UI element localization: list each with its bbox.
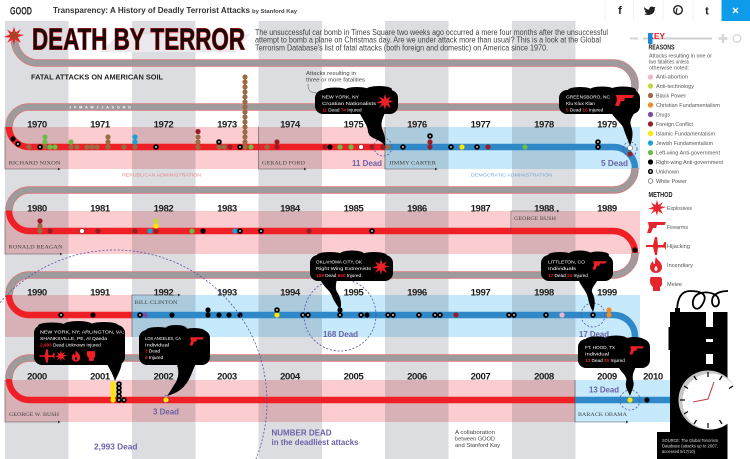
- logo: GOOD: [10, 6, 32, 18]
- method icons: [40, 349, 95, 363]
- main title: DEATH BY TERROR: [32, 22, 245, 56]
- year labels: 1980: [27, 204, 47, 214]
- callout: New York, Arlington, Shanksville 2001: NEW YORK, NY; ARLINGTON, VA;: [40, 330, 124, 334]
- key: reasons: Right-wing Anti-government: [656, 160, 724, 166]
- clock-tower time bomb: [657, 291, 738, 459]
- year labels: 1986: [407, 204, 427, 214]
- callout: Oklahoma City 1995: [310, 250, 393, 311]
- year labels: 2007: [471, 372, 490, 382]
- callout: Oklahoma City 1995: OKLAHOMA CITY, OK: [316, 260, 363, 264]
- callout: Ft. Hood 2009: FT. HOOD, TX: [585, 345, 616, 350]
- year labels: 1993: [217, 288, 237, 298]
- header bar: [0, 0, 750, 21]
- year labels: 1989: [597, 204, 617, 214]
- year labels: 2002: [154, 372, 173, 382]
- callout: New York, Arlington, Shanksville 2001: SHANKSVILLE, PE, Al Qaeda: [40, 336, 107, 341]
- year labels: 1976: [407, 120, 427, 130]
- share buttons: t: [705, 6, 709, 18]
- year labels: 2006: [407, 372, 427, 382]
- callout: New York 1975: 11 Dead 74 Injured: [322, 108, 362, 112]
- year labels: 1999: [597, 288, 617, 298]
- death-toll labels: 13 Dead: [589, 384, 619, 394]
- key: reasons: Foreign Conflict: [656, 122, 694, 128]
- key: method: Melee: [667, 282, 682, 288]
- background column stripes: [5, 21, 576, 459]
- callout: New York 1975: Croatian Nationalists: [322, 101, 377, 106]
- callout: Littleton 1999: LITTLETON, CO: [548, 260, 585, 264]
- article title: Transparency: A History of Deadly Terrorist Attacks: [53, 6, 251, 15]
- key: reasons: REASONS: [648, 44, 675, 52]
- year labels: 2005: [344, 372, 364, 382]
- year labels: 1997: [471, 288, 490, 298]
- year labels: 1979: [597, 120, 617, 130]
- month scale: J F M A M J J A S O N D: [69, 106, 131, 110]
- year labels: 1988: [534, 204, 555, 214]
- death-toll labels: 2,993 Dead: [94, 442, 138, 452]
- intro text: Terrorism Database's list of fatal attacks (both foreign and domestic) on America since 1970.: [255, 44, 548, 52]
- key: method: Incendiary: [667, 263, 693, 269]
- key: reasons: otherwise noted:: [649, 66, 689, 72]
- callout: New York, Arlington, Shanksville 2001: 2,993 Dead Unknown Injured: [40, 342, 101, 348]
- fuse: [677, 291, 728, 312]
- source note: Database (attacks up to 2007,: [662, 444, 718, 448]
- key: reasons: Black Power: [656, 94, 686, 100]
- death-toll labels: 17 Dead: [579, 329, 609, 339]
- annotation: attacks resulting in three or more fatalities: Attacks resulting in: [306, 71, 356, 77]
- year labels: 1994: [280, 288, 301, 298]
- credit text: between GOOD: [455, 436, 495, 442]
- callout: Los Angeles 2002: Individual: [145, 342, 169, 348]
- president term markers: RICHARD NIXON: [8, 160, 60, 166]
- key: method: METHOD: [648, 192, 672, 199]
- zoom controls: [630, 34, 741, 43]
- year labels: 1992: [154, 288, 173, 298]
- key: reasons: Attacks resulting in one or: [649, 54, 712, 60]
- year labels: 1998: [534, 288, 555, 298]
- callout: Littleton 1999: [541, 250, 613, 312]
- president term markers: BARACK OBAMA: [578, 412, 627, 418]
- key: reasons: White Power: [656, 179, 687, 185]
- year labels: 2009: [597, 372, 617, 382]
- callout: Ft. Hood 2009: [578, 336, 650, 396]
- grey outline for non-fatal track sections: [9, 36, 635, 379]
- clock face: [678, 370, 738, 430]
- callout: Ft. Hood 2009: Individual: [585, 352, 609, 356]
- democratic administration label: DEMOCRATIC ADMINISTRATION: [471, 172, 553, 178]
- credit text: A collaboration: [455, 430, 495, 436]
- year labels: 1982: [154, 204, 173, 214]
- administration bands: [5, 127, 670, 422]
- source note: accessed 5/17/10): [662, 449, 696, 454]
- callout: Ft. Hood 2009: 13 Dead 30 Injured: [585, 358, 625, 363]
- year labels: 1974: [280, 120, 301, 130]
- callout: Los Angeles 2002: [139, 325, 210, 396]
- year labels: 2001: [90, 372, 111, 382]
- callout: Greensboro 1979: Klu Klux Klan: [566, 101, 595, 106]
- callout: Oklahoma City 1995: Right Wing Extremists: [316, 266, 372, 271]
- death-toll labels: 168 Dead: [323, 329, 358, 339]
- death-toll labels: [94, 158, 628, 452]
- callout: Los Angeles 2002: LOS ANGELES, CA: [145, 336, 182, 341]
- callout: Greensboro 1979: GREENSBORO, NC: [566, 94, 611, 100]
- tower body: [657, 312, 728, 459]
- year labels: 2004: [280, 372, 301, 382]
- callout: Los Angeles 2002: 4 Injured: [145, 355, 164, 360]
- key heading: KEY: [648, 32, 666, 41]
- timeline track: [9, 36, 670, 400]
- byline: by Stanford Kay: [252, 9, 297, 15]
- death-toll labels: 3 Dead: [153, 406, 179, 416]
- intro text: [255, 28, 608, 52]
- intro text: attempt to bomb a plane on Christmas day. Are we under attack more than usual? This is a look at the Global: [255, 36, 601, 44]
- year labels: 1990: [27, 288, 47, 298]
- key: reasons: Islamic Fundamentalism: [656, 132, 716, 138]
- year labels: 2008: [534, 372, 555, 382]
- year labels: 1978: [534, 120, 555, 130]
- callout: New York 1975: [315, 86, 398, 146]
- president term markers: [5, 127, 628, 423]
- subheading: FATAL ATTACKS ON AMERICAN SOIL: [31, 72, 163, 82]
- callout: Littleton 1999: 17 Dead 24 Injured: [548, 273, 588, 278]
- year labels: 1975: [344, 120, 364, 130]
- death-toll labels: NUMBER DEAD: [272, 428, 332, 438]
- key: reasons: Drugs: [656, 112, 670, 118]
- year labels: 1970: [27, 120, 47, 130]
- source note: [662, 438, 718, 454]
- president term markers: GEORGE BUSH: [514, 216, 556, 222]
- callout: Greensboro 1979: [559, 86, 640, 146]
- president term markers: GERALD FORD: [262, 160, 305, 166]
- year labels: 2010: [643, 372, 663, 382]
- attack dots: [10, 74, 650, 403]
- year labels: 1984: [280, 204, 301, 214]
- key: reasons: Unknown: [656, 170, 679, 176]
- credit text: and Stanford Kay: [455, 443, 500, 449]
- dashed death-toll circles: [0, 138, 640, 459]
- year labels: 1985: [344, 204, 364, 214]
- key: method: Firearms: [667, 225, 688, 231]
- source note: SOURCE: The Global Terrorism: [662, 438, 718, 443]
- year labels: 1996: [407, 288, 427, 298]
- slider handle: [648, 33, 652, 44]
- callout: Greensboro 1979: 5 Dead 10 Injured: [566, 108, 604, 112]
- year labels: 1981: [90, 204, 111, 214]
- share buttons: f: [618, 5, 622, 17]
- year labels: 1973: [217, 120, 237, 130]
- republican administration label: REPUBLICAN ADMINISTRATION: [122, 172, 202, 178]
- year labels: 1991: [90, 288, 111, 298]
- callout: New York 1975: NEW YORK, NY: [322, 94, 360, 100]
- share buttons: ×: [732, 4, 739, 18]
- callout: Oklahoma City 1995: 168 Dead 650 Injured: [316, 273, 361, 278]
- explosion at track start: [4, 27, 24, 45]
- key: reasons: two fatalities unless: [649, 60, 689, 66]
- key: reasons: Left-wing Anti-government: [656, 150, 721, 156]
- president term markers: GEORGE W. BUSH: [9, 412, 59, 418]
- republican red track: [9, 127, 635, 400]
- callout: Los Angeles 2002: 3 Dead: [145, 348, 161, 354]
- annotation: attacks resulting in three or more fatalities: [306, 71, 366, 93]
- year labels: 1977: [471, 120, 490, 130]
- year labels: 1972: [154, 120, 173, 130]
- year labels: [27, 120, 663, 382]
- year labels: 2003: [217, 372, 237, 382]
- key: reasons: [648, 44, 724, 185]
- intro text: The unsuccessful car bomb in Times Square two weeks ago occurred a mere four months after the unsuccessful: [255, 28, 608, 37]
- president term markers: JIMMY CARTER: [389, 160, 436, 166]
- president term markers: BILL CLINTON: [134, 300, 178, 306]
- callout: Littleton 1999: Individuals: [548, 266, 577, 271]
- callout: New York, Arlington, Shanksville 2001: [34, 321, 125, 381]
- year labels: 1971: [90, 120, 111, 130]
- key: reasons: Jewish Fundamentalism: [656, 141, 714, 147]
- key: method: Hijacking: [667, 244, 690, 250]
- president term markers: RONALD REAGAN: [8, 244, 62, 250]
- death-toll labels: 5 Dead: [601, 158, 628, 168]
- key: method: Explosives: [667, 206, 692, 212]
- year labels: 1983: [217, 204, 237, 214]
- credit text: [455, 430, 500, 449]
- key: reasons: Christian Fundamentalism: [656, 103, 721, 109]
- year labels: 1987: [471, 204, 490, 214]
- annotation: attacks resulting in three or more fatalities: three or more fatalities: [306, 78, 366, 84]
- death-toll labels: in the deadliest attacks: [272, 437, 359, 447]
- year labels: 2000: [27, 372, 47, 382]
- share buttons: [605, 0, 750, 21]
- year labels: 1995: [344, 288, 364, 298]
- key: method: [646, 192, 693, 291]
- death-toll labels: 11 Dead: [352, 158, 382, 168]
- key: reasons: Anti-abortion: [656, 74, 688, 80]
- democratic blue track: [132, 147, 670, 400]
- key: reasons: Anti-technology: [656, 84, 694, 90]
